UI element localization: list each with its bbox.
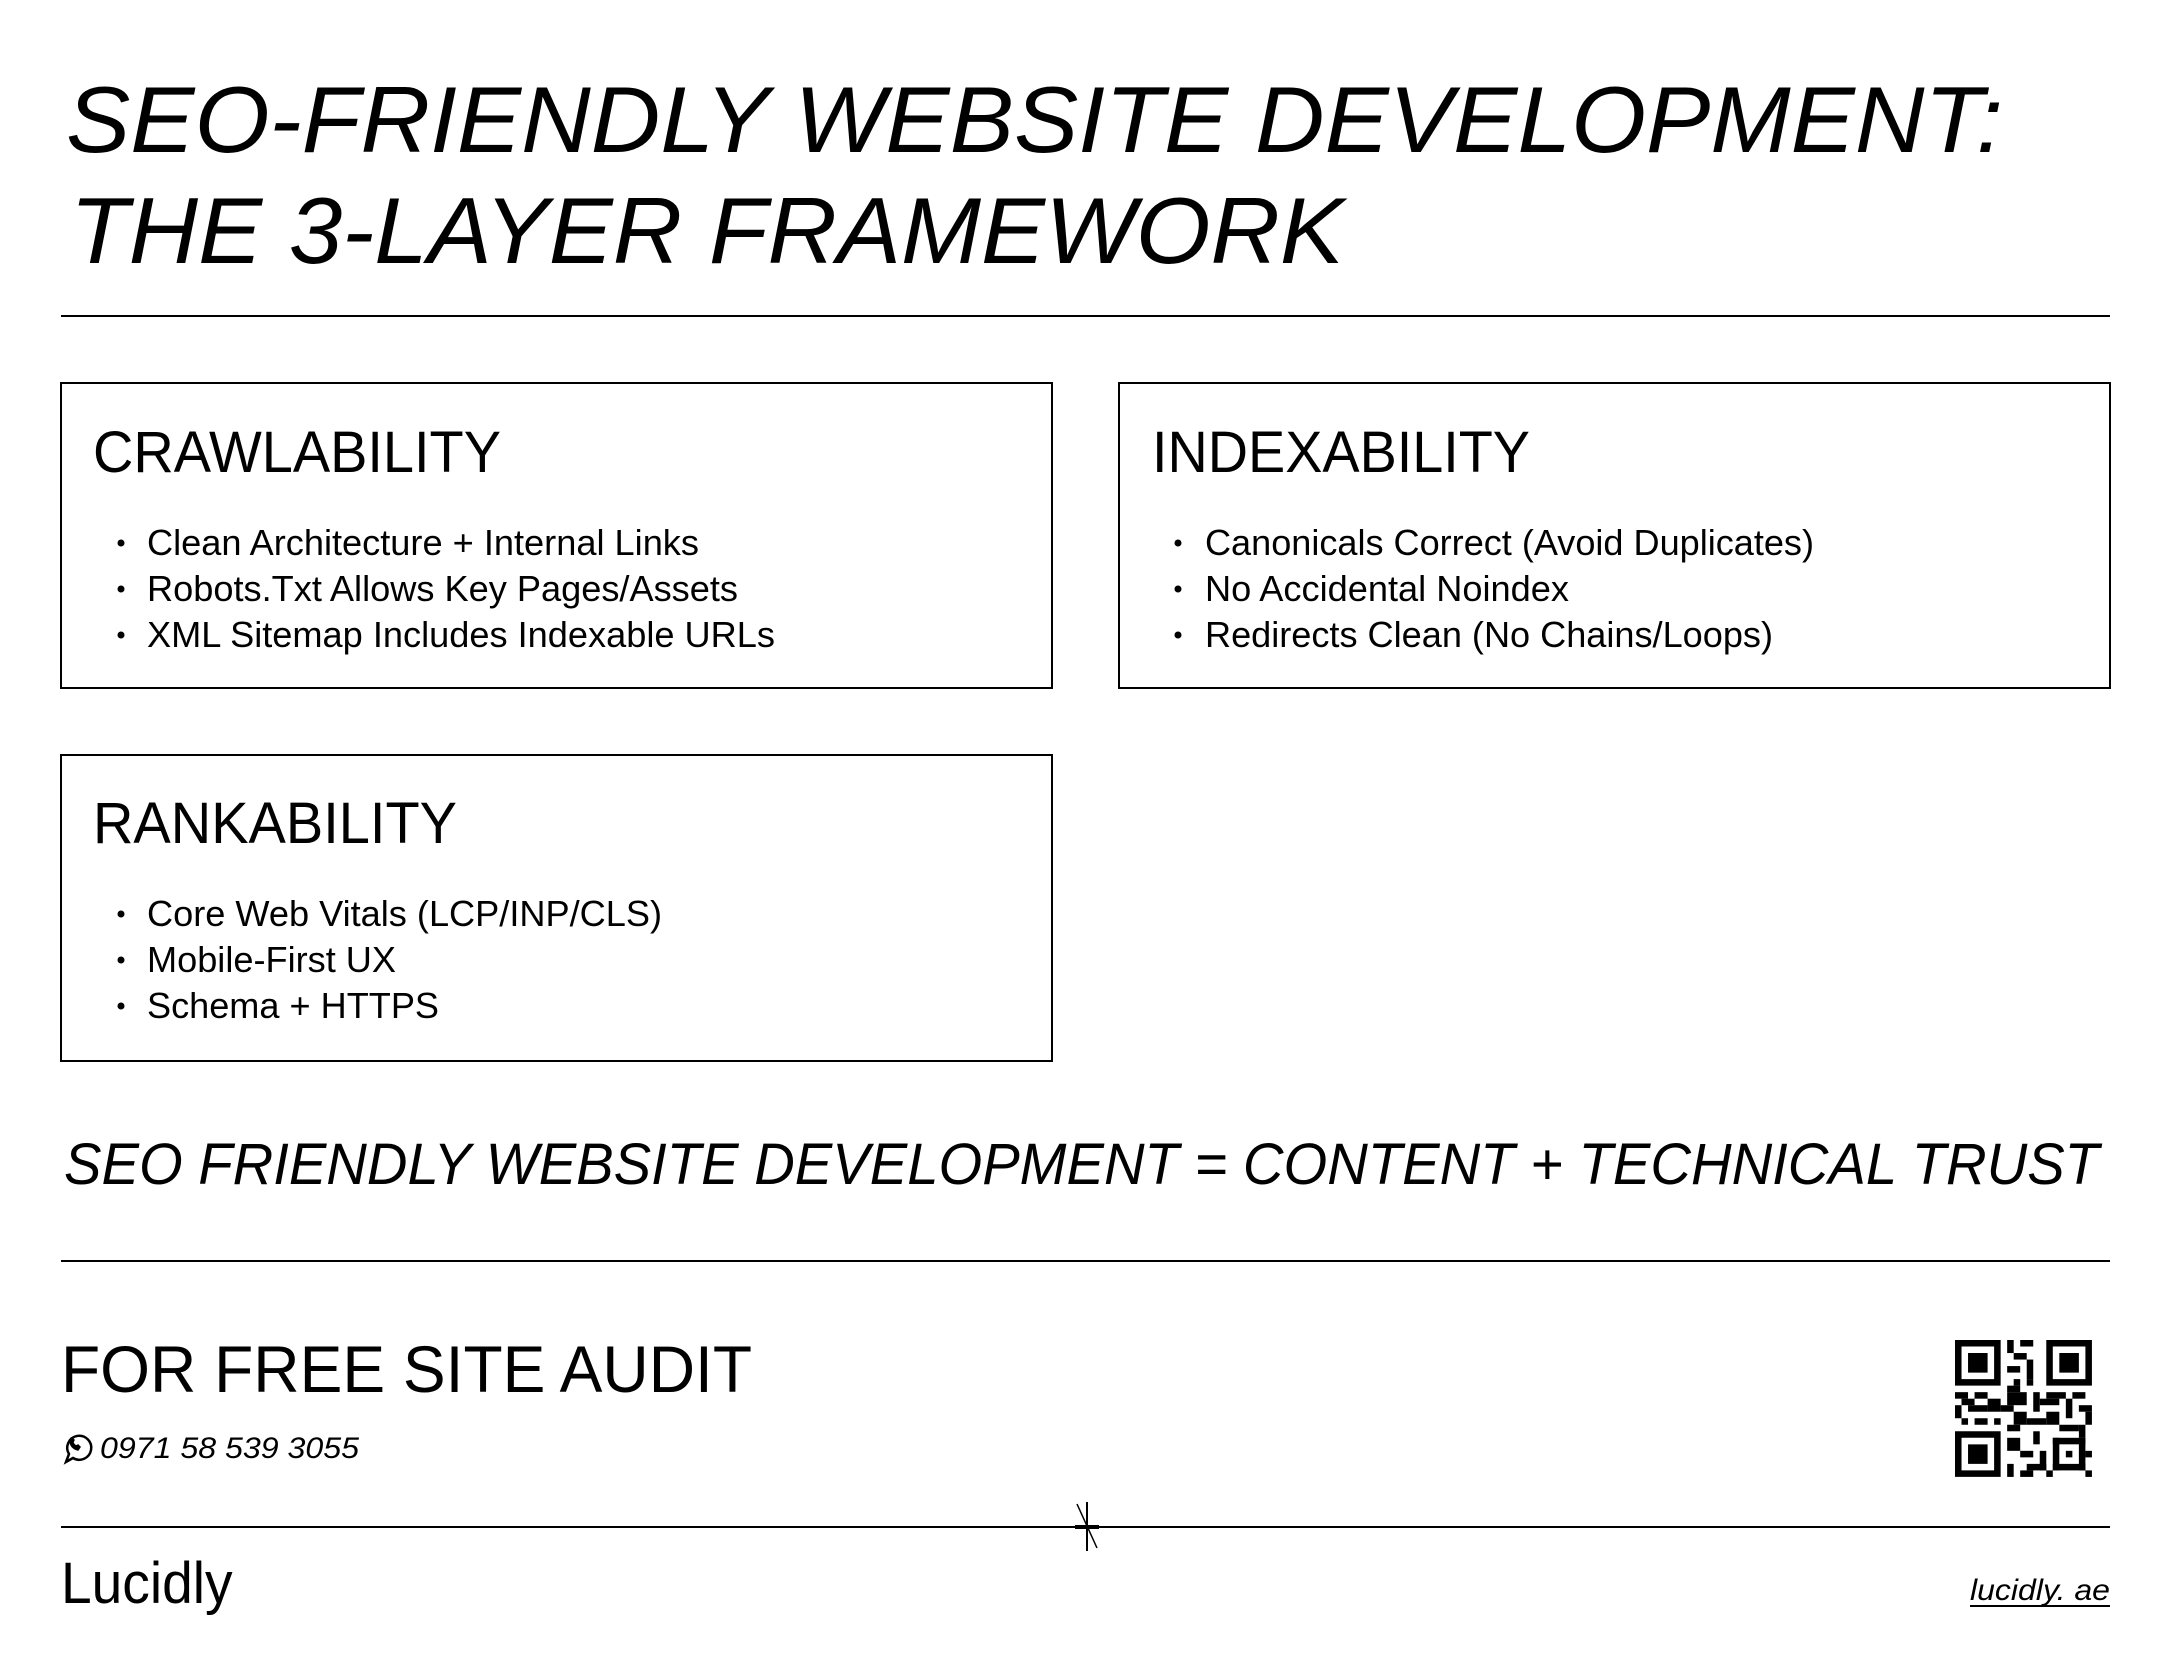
heading: indexability: INDEXABILITY xyxy=(1152,420,1530,485)
panel: rankability xyxy=(61,755,1052,1061)
title: SEO-FRIENDLY WEBSITE DEVELOPMENT: xyxy=(66,67,2003,172)
heading: rankability: RANKABILITY xyxy=(93,791,457,856)
equation statement: SEO FRIENDLY WEBSITE DEVELOPMENT = CONTENT + TECHNICAL TRUST xyxy=(64,1132,2102,1197)
bullet list: indexability: Redirects Clean (No Chains/Loops) xyxy=(1205,614,1773,655)
heading: crawlability: CRAWLABILITY xyxy=(93,420,501,485)
bullet list: rankability xyxy=(118,893,662,1026)
bullet list: rankability: Core Web Vitals (LCP/INP/CLS) xyxy=(147,893,662,934)
bullet list: rankability: Mobile-First UX xyxy=(147,939,396,980)
bullet list: indexability: No Accidental Noindex xyxy=(1205,568,1569,609)
bullet list: crawlability xyxy=(118,522,775,655)
bullet list: rankability: Schema + HTTPS xyxy=(147,985,439,1026)
icon: whatsapp xyxy=(66,1436,91,1462)
bullet list: crawlability: XML Sitemap Includes Indexable URLs xyxy=(147,614,775,655)
cta heading: FOR FREE SITE AUDIT xyxy=(61,1332,752,1406)
logo: lucidly: Lucidly xyxy=(61,1552,233,1616)
panel: indexability xyxy=(1119,383,2110,688)
qr code xyxy=(1955,1340,2092,1477)
panel: crawlability xyxy=(61,383,1052,688)
bullet list: crawlability: Robots.Txt Allows Key Pages/Assets xyxy=(147,568,738,609)
title: THE 3-LAYER FRAMEWORK xyxy=(70,178,1348,283)
bullet list: indexability: Canonicals Correct (Avoid Duplicates) xyxy=(1205,522,1814,563)
contact: whatsapp phone: 0971 58 539 3055 xyxy=(100,1432,359,1465)
website link: lucidly. ae xyxy=(1970,1574,2110,1607)
title xyxy=(66,67,2003,283)
icon: sparkle mark xyxy=(1075,1502,1099,1551)
bullet list: crawlability: Clean Architecture + Internal Links xyxy=(147,522,699,563)
bullet list: indexability xyxy=(1174,522,1814,655)
